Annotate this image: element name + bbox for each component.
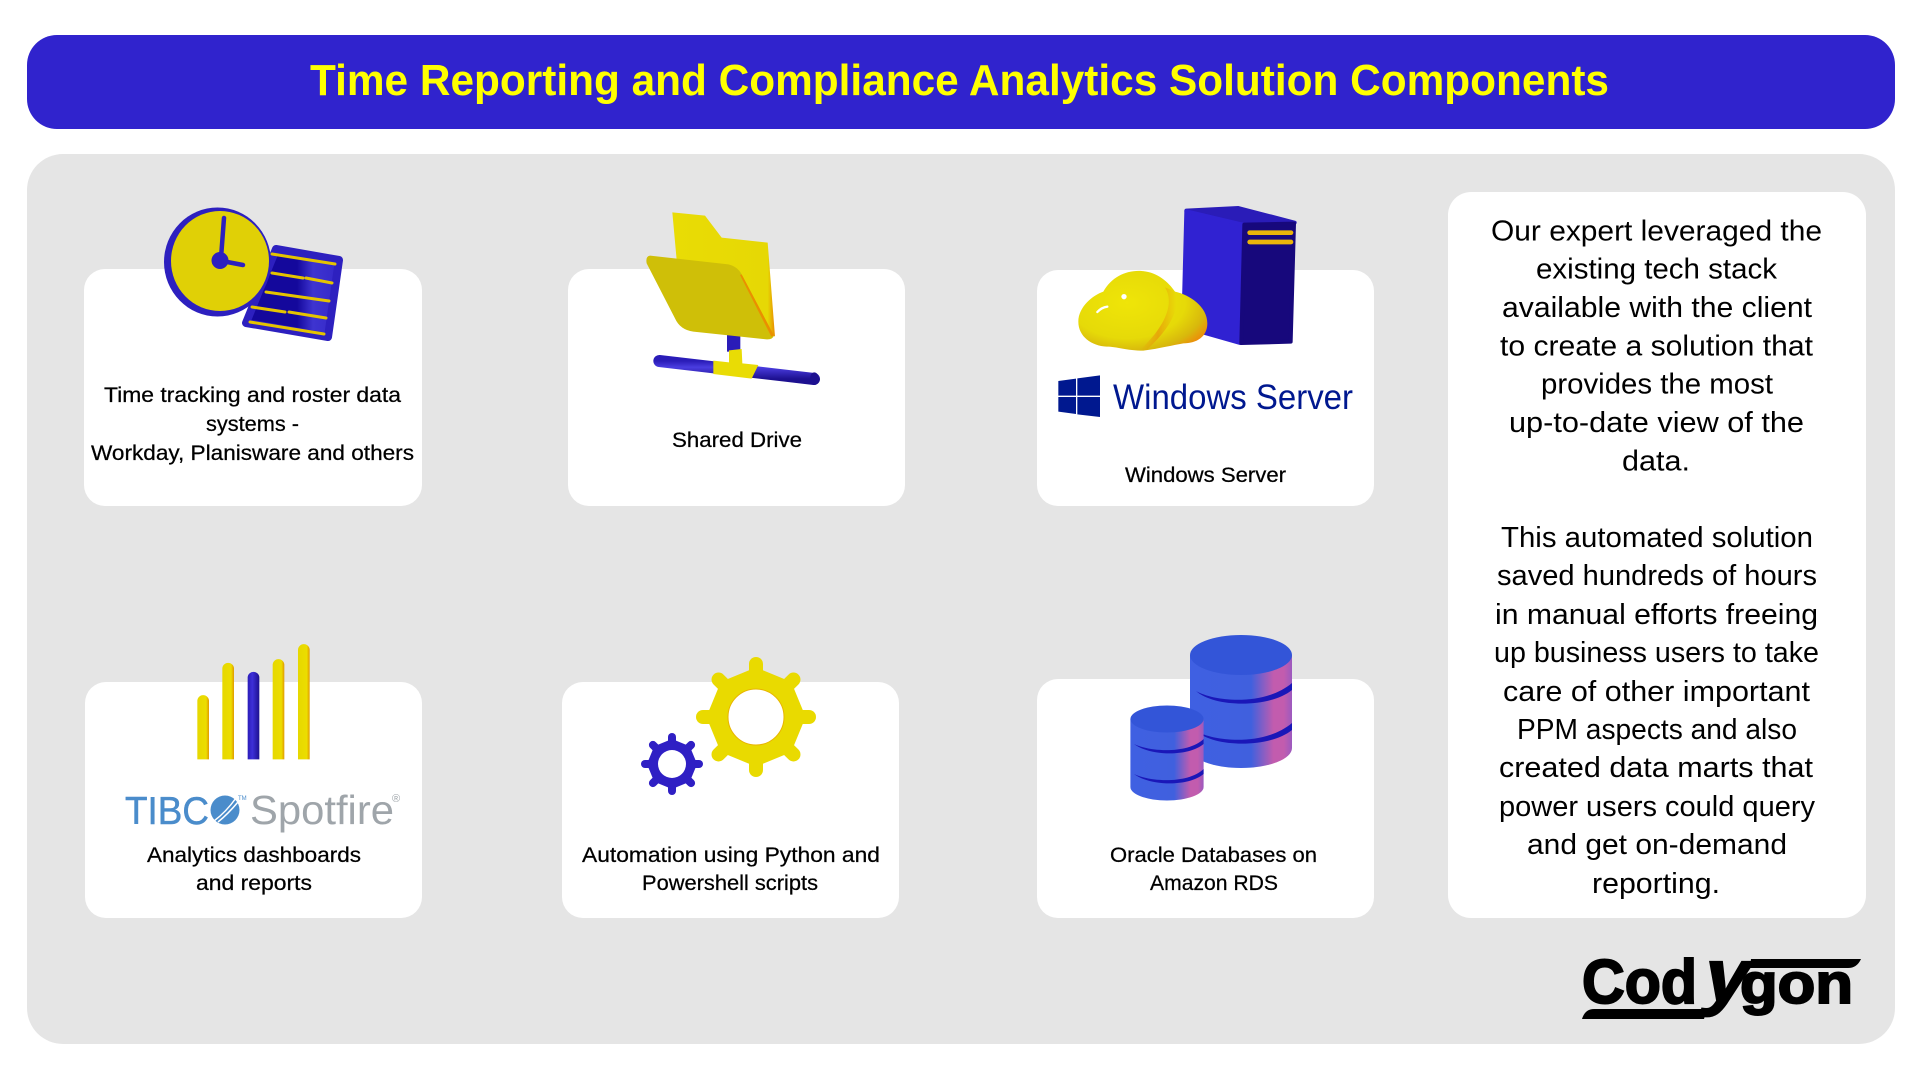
icon: blue gear: [645, 737, 699, 791]
logo: tibco spotfire: TIBC: [125, 790, 209, 833]
label: Amazon RDS: [1150, 872, 1278, 895]
paragraph: tech stack: provides the most: [1541, 368, 1773, 400]
paragraph: tech stack: to create a solution that: [1500, 330, 1813, 362]
paragraph: tech stack: data.: [1622, 446, 1690, 478]
icon: network folder: [646, 212, 819, 385]
paragraph: outcome: This automated solution: [1501, 522, 1813, 554]
label: Powershell scripts: [642, 872, 818, 895]
label: [582, 844, 880, 895]
title: Time Reporting and Compliance Analytics Solution Components: [310, 56, 1609, 105]
paragraph: outcome: [1494, 522, 1819, 900]
logo: codygon: gon: [1740, 952, 1853, 1016]
card: automation: [562, 664, 899, 918]
label: and reports: [196, 872, 312, 895]
icon: server and cloud: [1078, 208, 1295, 351]
paragraph: outcome: care of other important: [1503, 676, 1810, 708]
title banner: [27, 35, 1895, 129]
logo: tibco spotfire: [125, 787, 400, 833]
label: Workday, Planisware and others: [91, 442, 414, 465]
label: Analytics dashboards: [147, 844, 361, 867]
paragraph: tech stack: available with the client: [1502, 292, 1812, 324]
paragraph: outcome: created data marts that: [1499, 752, 1813, 784]
icon: yellow gear: [703, 664, 809, 770]
icon: database stacks: [1130, 635, 1292, 800]
panel: description: [1448, 192, 1866, 918]
logo: codygon: Cod: [1582, 948, 1697, 1017]
label: [147, 844, 361, 895]
card: windows server: [1037, 208, 1374, 506]
card: time tracking: [84, 208, 422, 506]
logo: tibco spotfire: TM: [238, 796, 247, 802]
icon: bar chart: [197, 644, 310, 759]
paragraph: outcome: and get on-demand: [1527, 829, 1787, 861]
paragraph: outcome: in manual efforts freeing: [1495, 599, 1818, 631]
label: [1110, 844, 1317, 895]
label: Windows Server: [1125, 464, 1286, 487]
logo: tibco spotfire: Spotfire: [250, 787, 394, 833]
paragraph: outcome: reporting.: [1592, 868, 1720, 900]
paragraph: outcome: saved hundreds of hours: [1497, 560, 1817, 592]
label: Shared Drive: [672, 429, 802, 452]
card: shared drive: [568, 212, 905, 506]
label: [91, 384, 414, 465]
label: Time tracking and roster data: [104, 384, 401, 407]
paragraph: outcome: power users could query: [1499, 791, 1815, 823]
logo: codygon: [1582, 934, 1861, 1019]
label: systems -: [206, 413, 299, 436]
label: Oracle Databases on: [1110, 844, 1317, 867]
paragraph: outcome: PPM aspects and also: [1517, 714, 1797, 746]
paragraph: tech stack: existing tech stack: [1536, 254, 1777, 286]
paragraph: outcome: up business users to take: [1494, 637, 1819, 669]
paragraph: tech stack: [1491, 216, 1822, 478]
paragraph: tech stack: Our expert leveraged the: [1491, 216, 1822, 248]
label: Automation using Python and: [582, 844, 880, 867]
logo: codygon: y: [1696, 934, 1761, 1017]
icon: clock and document: [164, 208, 339, 337]
card: oracle: [1037, 635, 1374, 918]
card: analytics: [85, 644, 422, 918]
paragraph: tech stack: up-to-date view of the: [1509, 407, 1804, 439]
logo: windows server: Windows Server: [1113, 378, 1353, 417]
logo: tibco spotfire: ®: [392, 793, 400, 805]
